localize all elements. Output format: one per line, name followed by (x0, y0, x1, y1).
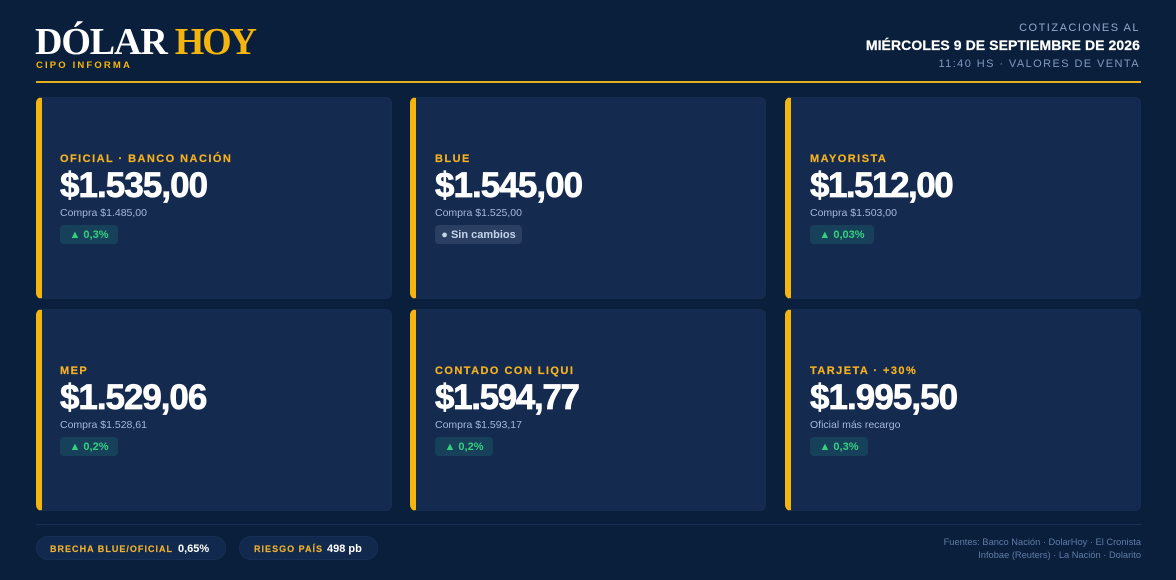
title: DÓLARHOY (35, 21, 255, 63)
panel: oficial: OFICIAL · BANCO NACIÓN (60, 153, 232, 165)
panel: mep (36, 309, 392, 511)
panel: tarjeta (785, 309, 1141, 511)
panel: contado con liqui: $1.594,77 (435, 378, 579, 417)
panel: mayorista (785, 97, 1141, 299)
date block: MIÉRCOLES 9 DE SEPTIEMBRE DE 2026 (866, 37, 1140, 53)
change badge (810, 437, 868, 456)
panel: contado con liqui (410, 309, 766, 511)
change badge (60, 437, 118, 456)
subtitle: CIPO INFORMA (36, 60, 132, 71)
pill: riesgo pais: 498 pb (327, 543, 362, 555)
panel: tarjeta: TARJETA · +30% (810, 365, 917, 377)
change badge: ● Sin cambios (441, 229, 516, 241)
panel: blue: BLUE (435, 153, 471, 165)
panel: blue: Compra $1.525,00 (435, 207, 522, 219)
panel: mep: Compra $1.528,61 (60, 419, 147, 431)
panel: tarjeta: Oficial más recargo (810, 419, 900, 431)
change badge: ▲ 0,2% (444, 441, 484, 453)
panel: oficial (36, 97, 392, 299)
change badge (435, 437, 493, 456)
change badge: ▲ 0,3% (69, 229, 108, 241)
panel: mayorista: $1.512,00 (810, 166, 952, 205)
change badge: ▲ 0,03% (819, 229, 865, 241)
panel: mep: MEP (60, 365, 88, 377)
panel: contado con liqui: Compra $1.593,17 (435, 419, 522, 431)
change badge: ▲ 0,2% (69, 441, 108, 453)
sources: Fuentes: Banco Nación · DolarHoy · El Cronista (944, 537, 1141, 547)
pill: riesgo pais (239, 536, 378, 560)
panel: oficial: Compra $1.485,00 (60, 207, 147, 219)
date block (866, 22, 1140, 70)
panel: mep: $1.529,06 (60, 378, 206, 417)
panel: mayorista: MAYORISTA (810, 153, 887, 165)
panel: tarjeta: $1.995,50 (810, 378, 957, 417)
panel: mayorista: Compra $1.503,00 (810, 207, 897, 219)
change badge (435, 225, 522, 244)
header rule (36, 81, 1141, 83)
panel: contado con liqui: CONTADO CON LIQUI (435, 365, 574, 377)
footer (36, 524, 1141, 525)
pill: brecha: BRECHA BLUE/OFICIAL (50, 544, 173, 554)
pill: brecha (36, 536, 226, 560)
panel: blue (410, 97, 766, 299)
pill: riesgo pais: RIESGO PAÍS (254, 544, 323, 554)
pill: brecha: 0,65% (178, 543, 209, 555)
change badge: ▲ 0,3% (819, 441, 858, 453)
footer rule (36, 524, 1141, 525)
date block: 11:40 HS · VALORES DE VENTA (938, 58, 1140, 70)
sources (944, 537, 1141, 560)
change badge (810, 225, 874, 244)
change badge (60, 225, 118, 244)
sources: Infobae (Reuters) · La Nación · Dolarito (978, 550, 1141, 560)
date block: COTIZACIONES AL (1019, 22, 1140, 34)
panel: oficial: $1.535,00 (60, 166, 207, 205)
header (35, 21, 1141, 83)
panel: blue: $1.545,00 (435, 166, 582, 205)
